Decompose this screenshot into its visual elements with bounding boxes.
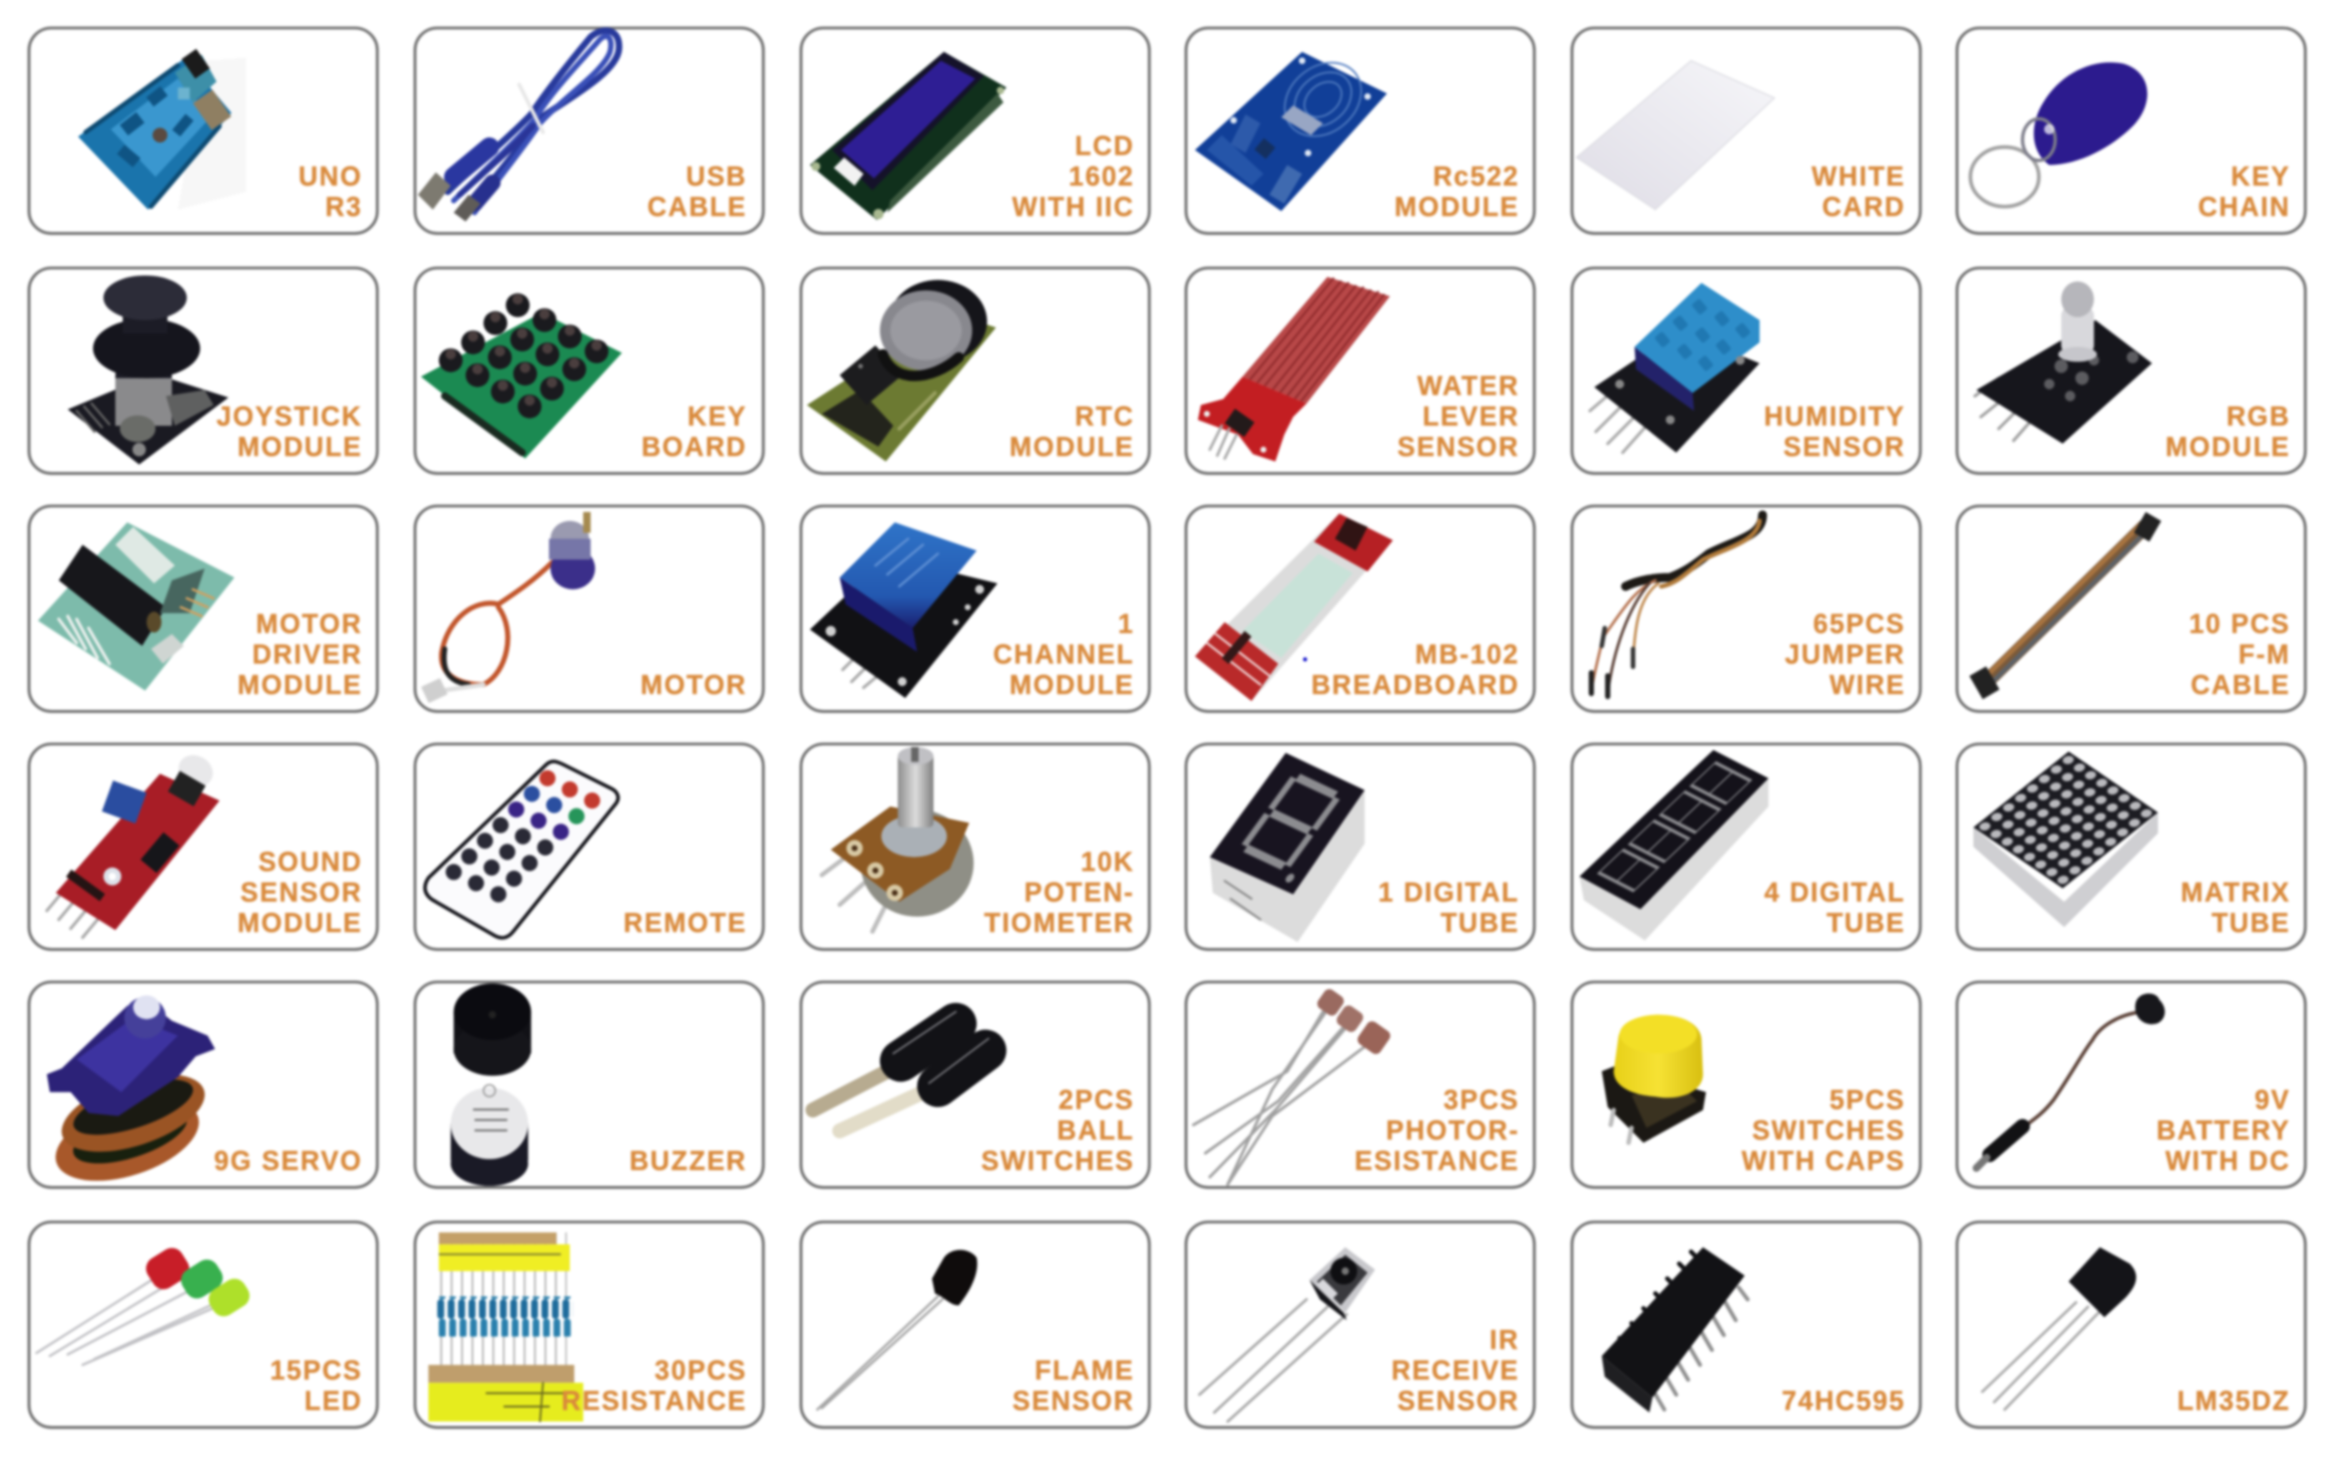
label: SENSOR xyxy=(240,876,362,908)
label: MB-102 xyxy=(1415,638,1519,670)
label: LM35DZ xyxy=(2177,1384,2290,1416)
icon: water sensor xyxy=(1198,277,1390,462)
panel: 74hc595 xyxy=(1572,1222,1920,1427)
label: 74HC595 xyxy=(1782,1384,1905,1416)
label: LED xyxy=(304,1384,362,1416)
panel: white card xyxy=(1572,28,1920,233)
label: MOTOR xyxy=(640,668,747,700)
label: 1602 xyxy=(1069,160,1134,192)
label: RGB xyxy=(2226,400,2290,432)
icon: stepper motor xyxy=(421,512,595,703)
label: MODULE xyxy=(1395,190,1519,222)
icon: ribbon cable xyxy=(1969,512,2161,699)
panel: keyboard xyxy=(415,268,763,473)
panel: ball switches xyxy=(801,982,1149,1187)
label: 5PCS xyxy=(1829,1083,1905,1115)
label: CHANNEL xyxy=(993,638,1134,670)
panel: rgb module xyxy=(1957,268,2305,473)
panel: flame sensor xyxy=(801,1222,1149,1427)
label: 65PCS xyxy=(1813,607,1905,639)
label: IR xyxy=(1490,1323,1519,1355)
label: CHAIN xyxy=(2198,190,2290,222)
icon: tilt switches xyxy=(813,1012,989,1131)
label: CABLE xyxy=(2191,668,2290,700)
label: 9G SERVO xyxy=(214,1144,362,1176)
icon: buzzers xyxy=(451,983,531,1186)
label: 10 PCS xyxy=(2189,607,2290,639)
icon: driver board xyxy=(38,522,234,691)
icon: dip chip xyxy=(1602,1247,1748,1413)
label: WATER xyxy=(1417,369,1519,401)
label: MODULE xyxy=(1010,430,1134,462)
icon: relay module xyxy=(810,522,997,698)
icon: leds xyxy=(36,1243,254,1365)
label: 3PCS xyxy=(1443,1083,1519,1115)
label: POTEN- xyxy=(1024,876,1134,908)
panel: sound sensor module xyxy=(29,744,377,949)
panel: mb-102 breadboard xyxy=(1186,506,1534,711)
panel: ir receive sensor xyxy=(1186,1222,1534,1427)
icon: jumper wires xyxy=(1591,515,1763,697)
label: 2PCS xyxy=(1058,1083,1134,1115)
label: MODULE xyxy=(2166,430,2290,462)
icon: led matrix xyxy=(1973,751,2158,927)
panel: 1 digital tube xyxy=(1186,744,1534,949)
label: BREADBOARD xyxy=(1311,668,1519,700)
icon: potentiometer xyxy=(822,747,974,932)
icon: lcd display xyxy=(810,52,1006,220)
label: SENSOR xyxy=(1397,430,1519,462)
label: 4 DIGITAL xyxy=(1764,876,1905,908)
label: WITH IIC xyxy=(1012,190,1134,222)
label: UNO xyxy=(298,160,362,192)
label: MOTOR xyxy=(256,607,362,639)
panel: 9v battery with dc xyxy=(1957,982,2305,1187)
panel: motor xyxy=(415,506,763,711)
label: MATRIX xyxy=(2181,876,2290,908)
icon: ir receiver xyxy=(1199,1247,1375,1421)
label: USB xyxy=(686,160,747,192)
label: BATTERY xyxy=(2157,1114,2290,1146)
label: SENSOR xyxy=(1012,1384,1134,1416)
icon: usb cable xyxy=(418,31,619,222)
icon: joystick xyxy=(68,275,228,464)
label: R3 xyxy=(325,190,362,222)
panel: water level sensor xyxy=(1186,268,1534,473)
label: ESISTANCE xyxy=(1355,1144,1519,1176)
label: Rc522 xyxy=(1433,160,1519,192)
label: 15PCS xyxy=(270,1354,362,1386)
panel: 1 channel module xyxy=(801,506,1149,711)
icon: four-digit display xyxy=(1579,750,1768,940)
label: TIOMETER xyxy=(984,906,1134,938)
label: 30PCS xyxy=(655,1354,747,1386)
label: WHITE xyxy=(1812,160,1905,192)
panel: remote xyxy=(415,744,763,949)
label: TUBE xyxy=(1441,906,1519,938)
panel: motor driver module xyxy=(29,506,377,711)
icon: uno board xyxy=(78,49,246,210)
label: SENSOR xyxy=(1397,1384,1519,1416)
label: CABLE xyxy=(647,190,747,222)
label: BOARD xyxy=(641,430,747,462)
label: SWITCHES xyxy=(1752,1114,1905,1146)
icon: white card xyxy=(1576,61,1774,210)
label: WITH CAPS xyxy=(1742,1144,1905,1176)
panel: 9g servo xyxy=(29,982,377,1197)
label: CARD xyxy=(1822,190,1905,222)
panel: joystick module xyxy=(29,268,377,473)
icon: servo xyxy=(45,995,215,1197)
label: MODULE xyxy=(238,430,362,462)
label: MODULE xyxy=(238,906,362,938)
panel: usb cable xyxy=(415,28,763,233)
icon: rfid module xyxy=(1195,48,1387,211)
label: TUBE xyxy=(2212,906,2290,938)
label: LEVER xyxy=(1423,400,1519,432)
label: RTC xyxy=(1075,400,1134,432)
label: MODULE xyxy=(238,668,362,700)
icon: photoresistors xyxy=(1193,987,1393,1184)
label: 10K xyxy=(1081,845,1134,877)
icon: sound sensor xyxy=(47,749,220,938)
panel: f-m cable xyxy=(1957,506,2305,711)
panel: key chain xyxy=(1957,28,2305,233)
icon: key fob xyxy=(1970,62,2147,207)
label: RECEIVE xyxy=(1391,1354,1519,1386)
label: LCD xyxy=(1075,129,1134,161)
label: SWITCHES xyxy=(981,1144,1134,1176)
label: BUZZER xyxy=(629,1144,747,1176)
label: F-M xyxy=(2238,638,2290,670)
icon: breadboard xyxy=(1195,513,1393,701)
label: 1 DIGITAL xyxy=(1378,876,1519,908)
icon: resistor strip xyxy=(428,1232,583,1421)
icon: push button xyxy=(1602,1015,1706,1143)
icon: single seven-segment display xyxy=(1210,753,1365,942)
label: PHOTOR- xyxy=(1386,1114,1519,1146)
label: MODULE xyxy=(1010,668,1134,700)
panel: matrix tube xyxy=(1957,744,2305,949)
icon: to-92 sensor xyxy=(1982,1247,2136,1410)
panel: 15pcs led xyxy=(29,1222,377,1427)
label: 9V xyxy=(2255,1083,2290,1115)
label: HUMIDITY xyxy=(1764,400,1905,432)
panel: 4 digital tube xyxy=(1572,744,1920,949)
label: SENSOR xyxy=(1783,430,1905,462)
label: REMOTE xyxy=(624,906,747,938)
label: FLAME xyxy=(1035,1354,1134,1386)
panel: lm35dz xyxy=(1957,1222,2305,1427)
panel: rc522 module xyxy=(1186,28,1534,233)
panel: humidity sensor xyxy=(1572,268,1920,473)
icon: 4x4 keypad xyxy=(421,293,622,459)
label: KEY xyxy=(2231,160,2290,192)
label: JOYSTICK xyxy=(217,400,362,432)
panel: buzzer xyxy=(415,982,763,1187)
label: WITH DC xyxy=(2165,1144,2290,1176)
panel: jumper wire xyxy=(1572,506,1920,711)
panel: rtc module xyxy=(801,268,1149,473)
label: BALL xyxy=(1057,1114,1134,1146)
label: 1 xyxy=(1118,607,1134,639)
panel: uno r3 xyxy=(29,28,377,233)
label: DRIVER xyxy=(252,638,362,670)
panel: 30pcs resistance xyxy=(415,1222,763,1427)
icon: rtc board xyxy=(807,280,996,462)
label: JUMPER xyxy=(1785,638,1905,670)
panel: 10k potentiometer xyxy=(801,744,1149,949)
label: RESISTANCE xyxy=(561,1384,747,1416)
icon: flame sensor xyxy=(817,1250,977,1410)
label: KEY xyxy=(687,400,747,432)
icon: battery clip cable xyxy=(1976,993,2165,1168)
panel: switches with caps xyxy=(1572,982,1920,1187)
panel: lcd 1602 xyxy=(801,28,1149,233)
icon: dht sensor xyxy=(1590,283,1760,453)
label: WIRE xyxy=(1830,668,1905,700)
icon: ir remote xyxy=(425,761,618,938)
label: TUBE xyxy=(1827,906,1905,938)
icon: rgb led module xyxy=(1975,281,2152,444)
panel: photoresistance xyxy=(1186,982,1534,1187)
label: SOUND xyxy=(258,845,362,877)
